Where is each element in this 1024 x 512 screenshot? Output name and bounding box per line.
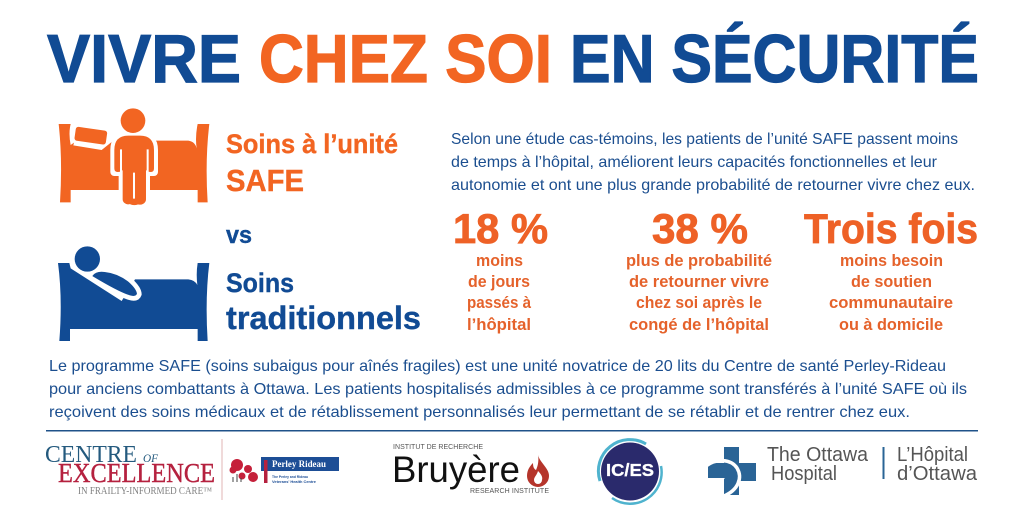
logo: Bruyère Research Institute [392,444,549,495]
label: vs: vs [226,222,252,249]
icon: person lying in bed [58,246,209,341]
stat: Trois fois: moins besoin [840,251,943,270]
label: Soins traditionnels: Soins [226,268,294,298]
stat: 18 %: l’hôpital [467,315,531,334]
intro text block: Selon une étude cas-témoins, les patients de l’unité SAFE passent moins [451,131,958,148]
logo: The Ottawa Hospital [704,444,978,496]
program description text: pour anciens combattants à Ottawa. Les patients hospitalisés admissibles à ce programme sont transférés à l’unité SAFE où ils [49,381,967,398]
logo: The Ottawa Hospital: Hospital [771,463,837,485]
logo: Bruyère Research Institute: Bruyère [392,449,520,490]
logo: The Ottawa Hospital: d’Ottawa [897,463,978,485]
stat: 38 %: 38 % [652,205,748,252]
stat: Trois fois: communautaire [829,293,953,312]
logo: The Ottawa Hospital: L’Hôpital [897,444,968,466]
logo: Centre of Excellence: CENTRE [45,442,137,468]
stat: Trois fois: de soutien [851,272,932,291]
program description text: Le programme SAFE (soins subaigus pour aînés fragiles) est une unité novatrice de 20 lits du Centre de santé Perley-Rideau [49,358,946,375]
stat: 18 %: passés à [467,293,531,312]
stat: 38 %: plus de probabilité [626,251,772,270]
logo: Centre of Excellence: IN FRAILTY-INFORMED CARE™ [78,486,212,497]
intro text block: de temps à l’hôpital, améliorent leurs capacités fonctionnelles et leur [451,154,938,171]
intro text block: autonomie et ont une plus grande probabilité de retourner vivre chez eux. [451,177,975,194]
logo: Bruyère Research Institute: INSTITUT DE RECHERCHE [393,444,483,451]
label: Soins traditionnels: traditionnels [226,300,421,336]
stat: Trois fois: Trois fois [804,205,978,252]
logo: Centre of Excellence [45,442,215,497]
logo: Bruyère Research Institute: RESEARCH INSTITUTE [470,488,549,495]
stat: 38 %: de retourner vivre [629,272,769,291]
label: Soins à l'unité SAFE: SAFE [226,163,304,198]
title [47,21,979,97]
title: CHEZ SOI [259,21,552,97]
stat: Trois fois: ou à domicile [839,315,943,334]
label: Soins traditionnels [226,268,421,336]
logo: Perley Rideau: The Perley and Rideau [272,474,308,479]
logo: IC/ES: IC/ES [606,460,654,480]
label: Soins à l'unité SAFE: Soins à l’unité [226,129,398,159]
stat: 38 %: congé de l’hôpital [629,315,769,334]
icon: person standing beside bed [59,108,209,209]
stat: Trois fois [804,205,978,334]
logo: Perley Rideau: Perley Rideau [272,460,327,470]
logo: Perley Rideau: Veterans’ Health Centre [272,479,317,484]
label: Soins à l'unité SAFE [226,129,398,198]
stat: 18 %: de jours [468,272,530,291]
logo: Perley Rideau [230,457,339,484]
stat: 38 % [626,205,772,334]
program description text: reçoivent des soins médicaux et de rétablissement personnalisés leur permettant de se rétablir et de rentrer chez eux. [49,404,910,421]
logo: Centre of Excellence: EXCELLENCE [58,458,215,488]
stat: 18 %: 18 % [453,205,548,252]
intro text block [451,131,975,194]
stat: 18 %: moins [476,251,523,270]
logo: IC/ES [598,440,662,504]
logo: Centre of Excellence: OF [143,451,159,465]
logo: The Ottawa Hospital: The Ottawa [767,444,869,466]
stat: 18 % [453,205,548,334]
program description text [49,358,967,421]
title: VIVRE [47,21,241,97]
title: EN SÉCURITÉ [570,21,979,97]
stat: 38 %: chez soi après le [636,293,762,312]
